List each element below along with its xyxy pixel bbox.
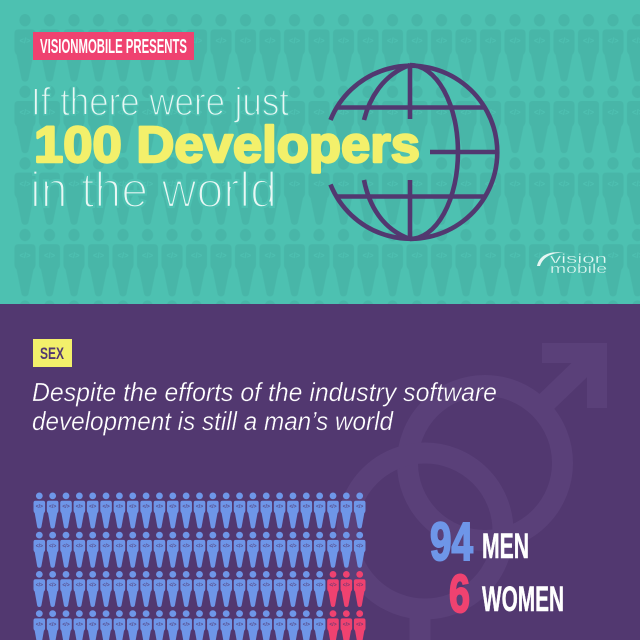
title: in the world: [30, 162, 277, 218]
tag: sex: [33, 339, 72, 367]
heading: sex statement: [32, 377, 497, 436]
icon: globe: [330, 65, 497, 239]
tag: VisionMobile presents: VISIONMOBILE PRESENTS: [40, 36, 187, 58]
stat: 6 women: [449, 564, 564, 624]
logo: vision mobile: mobile: [550, 261, 607, 276]
title: [30, 81, 420, 218]
stat: 94 men: MEN: [482, 527, 529, 566]
chart: 100 developer figures, 94 men and 6 women: [34, 492, 366, 640]
title: 100 Developers: [34, 116, 420, 173]
logo: vision mobile: vision: [550, 251, 607, 266]
stat: 94 men: [430, 512, 529, 572]
logo: vision mobile: [537, 251, 607, 276]
panel: header background: [0, 0, 640, 304]
tag: sex: SEX: [40, 344, 64, 363]
stat: 6 women: WOMEN: [482, 580, 564, 619]
panel: sex section background: [0, 304, 640, 640]
tag: VisionMobile presents: [33, 32, 194, 60]
stat: 94 men: 94: [430, 512, 473, 572]
icon: male and female symbols watermark: [347, 353, 597, 640]
heading: sex statement: Despite the efforts of the industry software: [32, 377, 497, 407]
background pattern of developer figures: [13, 14, 640, 304]
heading: sex statement: development is still a man’s world: [32, 406, 394, 436]
stat: 6 women: 6: [449, 564, 470, 624]
title: If there were just: [31, 81, 289, 124]
